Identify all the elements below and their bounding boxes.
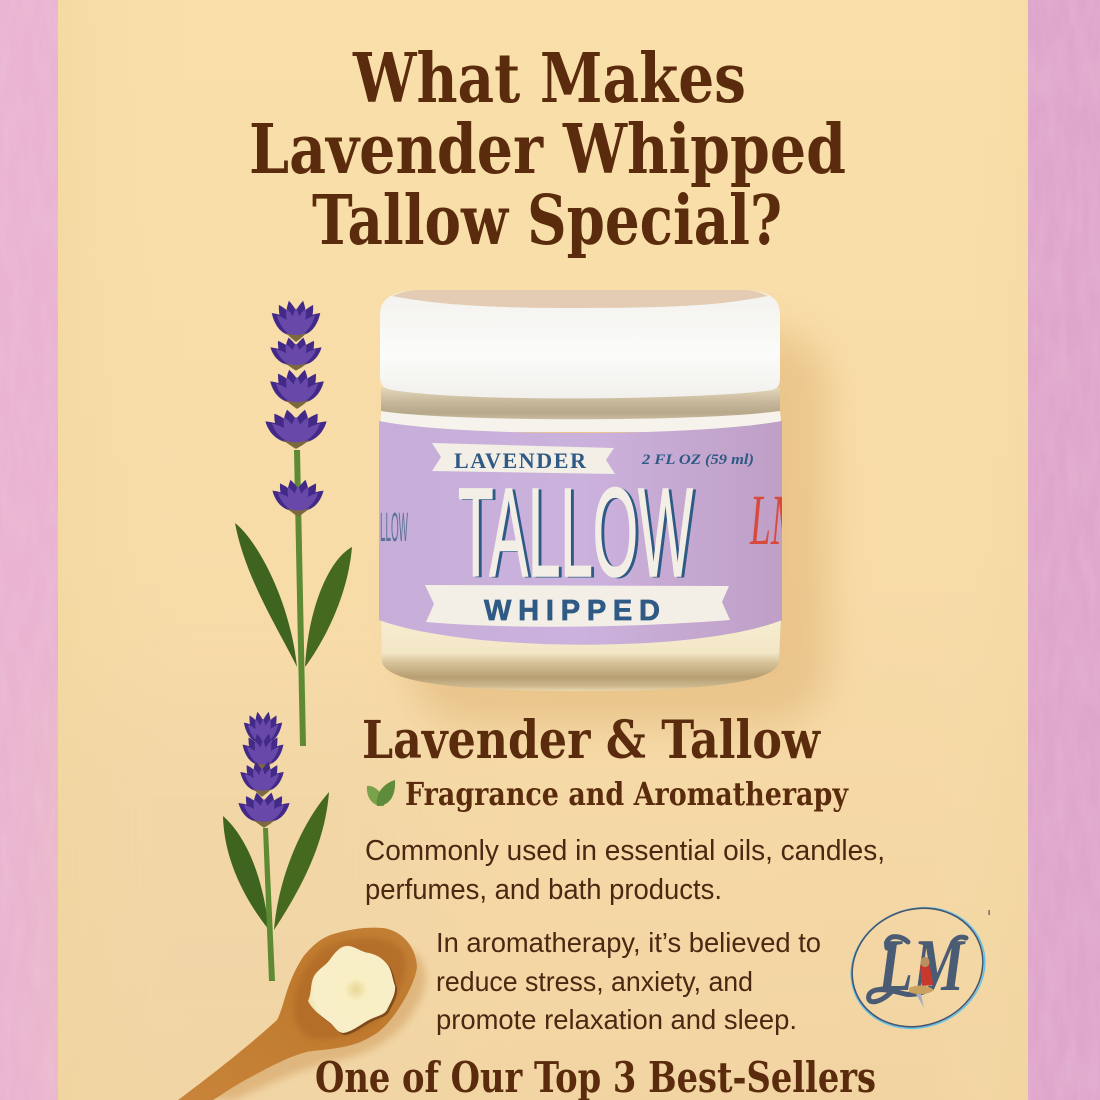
product jar bbox=[379, 290, 804, 691]
spoon with tallow bbox=[178, 928, 425, 1100]
lavender text: LAVENDER bbox=[454, 448, 587, 473]
section heading: Lavender & Tallow bbox=[362, 710, 821, 771]
paragraph: uses: Commonly used in essential oils, candles, bbox=[365, 835, 885, 867]
white band bbox=[380, 411, 781, 432]
paragraph: aromatherapy: In aromatherapy, it’s believed to bbox=[436, 927, 821, 958]
title: What Makes bbox=[352, 39, 746, 119]
side script: LM bbox=[749, 480, 804, 560]
subheading: Fragrance and Aromatherapy bbox=[405, 775, 849, 813]
tallow wordmark bbox=[458, 462, 696, 604]
jar base glass bbox=[381, 615, 781, 691]
paragraph: uses bbox=[365, 835, 885, 906]
monogram swashes bbox=[869, 937, 966, 1002]
jar lid bbox=[380, 290, 780, 398]
jar label: LLOW bbox=[380, 504, 408, 550]
title: Tallow Special? bbox=[312, 181, 782, 261]
tallow dollop bbox=[310, 948, 397, 1035]
jar label: TALLOW bbox=[458, 462, 693, 603]
paragraph: uses: perfumes, and bath products. bbox=[365, 874, 722, 906]
seated figure bbox=[909, 957, 934, 1008]
jar neck glass bbox=[381, 388, 780, 424]
whipped ribbon bbox=[425, 585, 730, 627]
title bbox=[249, 39, 846, 261]
jar label bbox=[379, 421, 804, 645]
lavender sprig two bbox=[223, 710, 329, 981]
logo badge bbox=[833, 888, 1003, 1048]
paragraph: aromatherapy bbox=[436, 927, 821, 1035]
jar shadow bbox=[410, 330, 830, 725]
small mark bbox=[988, 910, 990, 915]
icon: leaf bbox=[367, 780, 395, 806]
paragraph: aromatherapy: promote relaxation and sleep. bbox=[436, 1004, 797, 1035]
title: Lavender Whipped bbox=[249, 110, 846, 190]
jar label: TALLOW bbox=[461, 463, 696, 604]
paragraph: aromatherapy: reduce stress, anxiety, and bbox=[436, 966, 753, 997]
monogram: LM bbox=[877, 925, 966, 1007]
lavender ribbon bbox=[432, 443, 615, 474]
whipped text: WHIPPED bbox=[484, 595, 660, 627]
size text: 2 FL OZ (59 ml) bbox=[641, 452, 754, 468]
lavender sprig one bbox=[235, 299, 352, 746]
